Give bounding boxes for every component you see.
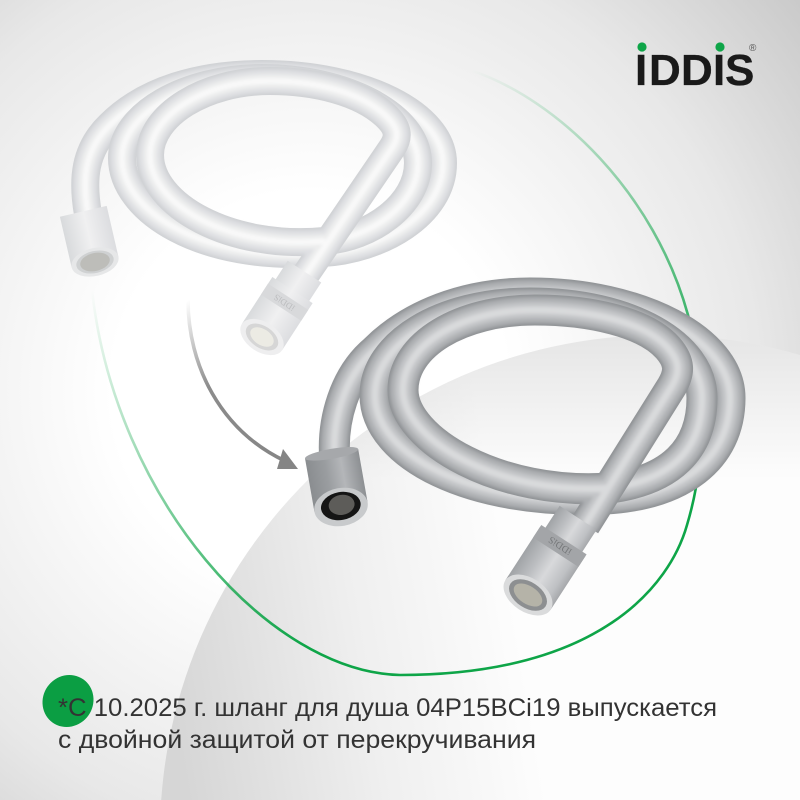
fitting: white hose threaded end: iDDiS — [272, 292, 297, 313]
footnote text — [58, 694, 717, 754]
fitting: white hose threaded end — [234, 259, 325, 363]
green accent blob — [32, 665, 104, 737]
logo: IDDIS: D — [649, 46, 681, 95]
fitting: silver hose left end — [304, 444, 371, 530]
green oval outline — [92, 70, 702, 675]
fitting: silver hose threaded end: iDDiS — [547, 534, 574, 557]
logo: IDDIS: S — [725, 46, 754, 95]
footnote text: с двойной защитой от перекручивания — [58, 726, 536, 754]
logo: IDDIS — [635, 42, 757, 95]
logo: IDDIS: I — [713, 46, 725, 95]
fitting: white hose left end — [60, 206, 122, 281]
fitting: silver hose threaded end — [496, 503, 601, 624]
footnote text: *С 10.2025 г. шланг для душа 04P15BCi19 выпускается — [58, 694, 717, 722]
logo: IDDIS: ® — [749, 43, 757, 54]
hose: silver, after — [334, 293, 730, 525]
background large disc — [161, 335, 800, 800]
logo: IDDIS: I — [635, 46, 647, 95]
hose: white, before — [85, 74, 443, 280]
logo: IDDIS: D — [681, 46, 713, 95]
arrow: white hose to silver hose — [188, 300, 298, 469]
